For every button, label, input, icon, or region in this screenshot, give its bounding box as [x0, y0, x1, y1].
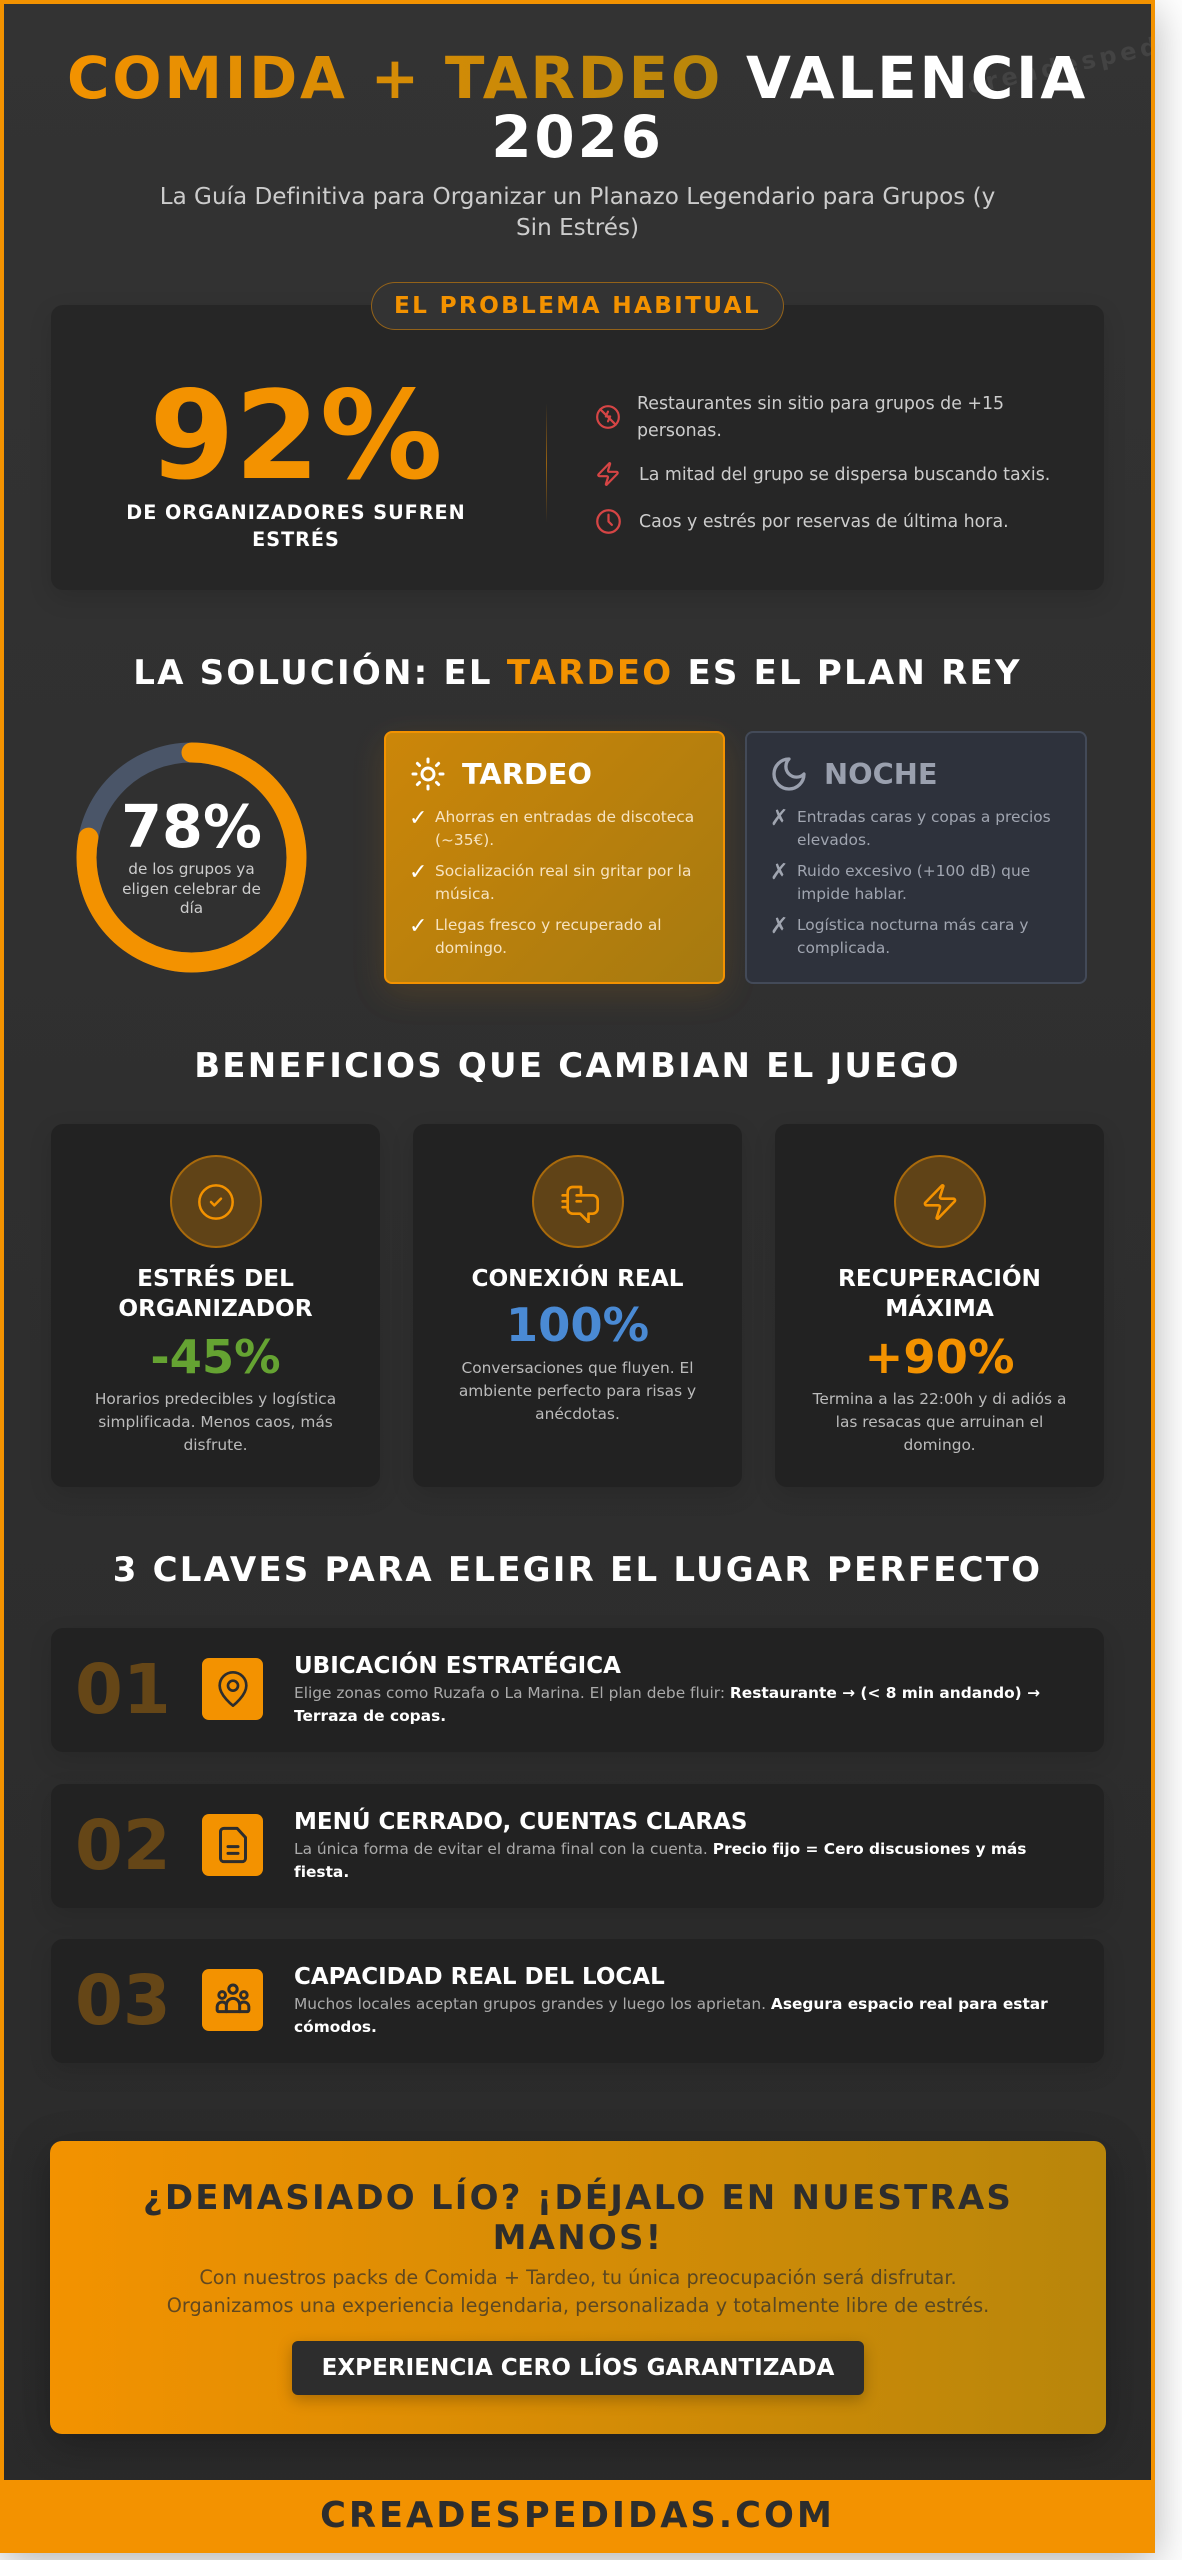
- tardeo check 3: ✓: [409, 914, 427, 939]
- subtitle: La Guía Definitiva para Organizar un Planazo Legendario para Grupos (y: [160, 184, 995, 210]
- noche point 1: [797, 808, 1051, 849]
- cta heading: ¿DEMASIADO LÍO? ¡DÉJALO EN NUESTRAS: [143, 2178, 1013, 2218]
- footer: [0, 2480, 1155, 2553]
- benefit card: conexión: [413, 1124, 742, 1487]
- benefit description: Horarios predecibles y logística: [95, 1390, 336, 1408]
- benefit description: [812, 1390, 1066, 1454]
- row description: cómodos.: [294, 2018, 377, 2036]
- card: tardeo: [384, 731, 725, 984]
- donut chart 78%: [76, 742, 306, 972]
- benefit title: [118, 1264, 313, 1322]
- problem 3 text: Caos y estrés por reservas de última hora.: [639, 512, 1009, 532]
- number 03: 03: [75, 1961, 171, 2041]
- noche point 3: complicada.: [797, 939, 890, 957]
- donut caption: [122, 860, 261, 917]
- benefit description: anécdotas.: [535, 1404, 620, 1422]
- benefit title: ORGANIZADOR: [118, 1295, 313, 1322]
- icon: moon: [772, 757, 806, 791]
- problem 3 icon: [596, 509, 621, 534]
- problem 1 icon: [596, 405, 620, 429]
- stat caption: ESTRÉS: [252, 528, 340, 551]
- icon: zap: [894, 1155, 986, 1248]
- tardeo point 1: (~35€).: [435, 831, 494, 849]
- benefit description: simplificada. Menos caos, más: [98, 1412, 333, 1430]
- noche cross 1: ✗: [770, 806, 788, 831]
- row title: MENÚ CERRADO, CUENTAS CLARAS: [294, 1809, 747, 1835]
- noche point 3: [797, 916, 1028, 957]
- key row 03: [51, 1939, 1104, 2063]
- icon: circle check: [170, 1155, 262, 1248]
- tardeo point 3: [435, 916, 662, 957]
- icon: map pin: [202, 1658, 263, 1720]
- benefit title: MÁXIMA: [885, 1295, 994, 1322]
- row description: fiesta.: [294, 1862, 349, 1880]
- problem 1 text: personas.: [637, 421, 722, 441]
- benefit description: [459, 1358, 696, 1422]
- tardeo point 3: Llegas fresco y recuperado al: [435, 916, 662, 934]
- footer brand: CREADESPEDIDAS.COM: [320, 2494, 835, 2536]
- row description: Terraza de copas.: [294, 1706, 446, 1724]
- benefit card: estrés: [51, 1124, 380, 1487]
- benefit title: RECUPERACIÓN: [838, 1264, 1041, 1292]
- key row 02: [51, 1784, 1104, 1908]
- tardeo point 2: música.: [435, 885, 495, 903]
- stat caption: [126, 501, 466, 551]
- title: 2026: [491, 103, 664, 171]
- cta button: EXPERIENCIA CERO LÍOS GARANTIZADA: [322, 2355, 834, 2381]
- noche cross 2: ✗: [770, 860, 788, 885]
- row title: CAPACIDAD REAL DEL LOCAL: [294, 1964, 665, 1990]
- benefit description: las resacas que arruinan el: [836, 1412, 1043, 1430]
- benefit title: ESTRÉS DEL: [137, 1264, 294, 1292]
- donut value: 78%: [121, 792, 262, 861]
- icon: file: [202, 1814, 263, 1876]
- tardeo check 2: ✓: [409, 860, 427, 885]
- noche point 2: impide hablar.: [797, 885, 907, 903]
- tardeo point 1: Ahorras en entradas de discoteca: [435, 808, 694, 826]
- title: [67, 44, 1088, 171]
- row description: Muchos locales aceptan grupos grandes y luego los aprietan. Asegura espacio real para estar: [294, 1994, 1048, 2012]
- cta button: [292, 2341, 864, 2395]
- noche title: NOCHE: [824, 757, 938, 791]
- number 01: 01: [75, 1650, 171, 1730]
- big stat 92%: 92%: [149, 364, 443, 507]
- benefit description: Termina a las 22:00h y di adiós a: [813, 1390, 1066, 1408]
- row description: Elige zonas como Ruzafa o La Marina. El plan debe fluir: Restaurante → (< 8 min andando) →: [294, 1684, 1040, 1702]
- noche point 3: Logística nocturna más cara y: [797, 916, 1028, 934]
- icon: sun: [412, 758, 444, 790]
- benefit description: disfrute.: [184, 1436, 247, 1454]
- row description: [294, 1994, 1048, 2036]
- noche cross 3: ✗: [770, 914, 788, 939]
- tardeo point 2: [435, 862, 691, 903]
- noche point 2: Ruido excesivo (+100 dB) que: [797, 862, 1030, 880]
- card: noche: [745, 731, 1087, 984]
- benefit description: ambiente perfecto para risas y: [459, 1382, 696, 1400]
- problem 1 text: Restaurantes sin sitio para grupos de +15: [637, 394, 1004, 414]
- benefit stat: 100%: [506, 1298, 649, 1352]
- problem 2 text: La mitad del grupo se dispersa buscando taxis.: [639, 465, 1050, 485]
- donut caption: eligen celebrar de: [122, 880, 261, 898]
- icon: chat: [532, 1155, 624, 1248]
- cta description: Con nuestros packs de Comida + Tardeo, tu única preocupación será disfrutar.: [199, 2266, 957, 2289]
- row title: UBICACIÓN ESTRATÉGICA: [294, 1653, 621, 1679]
- row description: [294, 1684, 1040, 1724]
- row description: La única forma de evitar el drama final con la cuenta. Precio fijo = Cero discusiones y más: [294, 1840, 1026, 1858]
- donut caption: de los grupos ya: [128, 860, 255, 878]
- heading: la solución: LA SOLUCIÓN: EL TARDEO ES EL PLAN REY: [133, 653, 1022, 693]
- benefit description: Conversaciones que fluyen. El: [461, 1358, 694, 1376]
- problem 1 text: [637, 394, 1004, 441]
- panel: el problema habitual: [51, 305, 1104, 590]
- noche point 1: elevados.: [797, 831, 871, 849]
- benefit title: CONEXIÓN REAL: [471, 1264, 684, 1292]
- subtitle: Sin Estrés): [516, 215, 639, 241]
- benefit description: [95, 1390, 336, 1454]
- problem 2 icon: [597, 462, 619, 486]
- cta description: Organizamos una experiencia legendaria, personalizada y totalmente libre de estrés.: [167, 2294, 989, 2317]
- title: COMIDA + TARDEO VALENCIA: [67, 44, 1088, 112]
- section pill: el problema habitual: [371, 282, 784, 330]
- number 02: 02: [75, 1806, 171, 1886]
- benefit stat: +90%: [865, 1330, 1014, 1384]
- tardeo check 1: ✓: [409, 806, 427, 831]
- cta heading: MANOS!: [493, 2218, 663, 2258]
- heading: claves: 3 CLAVES PARA ELEGIR EL LUGAR PERFECTO: [113, 1550, 1042, 1590]
- tardeo title: TARDEO: [462, 757, 592, 791]
- key row 01: [51, 1628, 1104, 1752]
- benefit description: domingo.: [903, 1436, 976, 1454]
- tardeo point 1: [435, 808, 694, 849]
- cta heading: [143, 2178, 1013, 2258]
- section pill: el problema habitual: EL PROBLEMA HABITUAL: [394, 292, 761, 319]
- noche point 2: [797, 862, 1030, 903]
- tardeo point 3: domingo.: [435, 939, 507, 957]
- noche point 1: Entradas caras y copas a precios: [797, 808, 1051, 826]
- icon: group: [202, 1969, 263, 2031]
- cta description: [167, 2266, 989, 2317]
- tardeo point 2: Socialización real sin gritar por la: [435, 862, 691, 880]
- stat caption: DE ORGANIZADORES SUFREN: [126, 501, 466, 524]
- donut caption: día: [180, 899, 203, 917]
- benefit card: recuperación: [775, 1124, 1104, 1487]
- call to action panel: [50, 2141, 1106, 2434]
- benefit stat: -45%: [150, 1330, 281, 1384]
- benefit title: [838, 1264, 1041, 1322]
- row description: [294, 1840, 1026, 1880]
- subtitle: [160, 184, 995, 241]
- heading: beneficios: BENEFICIOS QUE CAMBIAN EL JUEGO: [194, 1046, 961, 1086]
